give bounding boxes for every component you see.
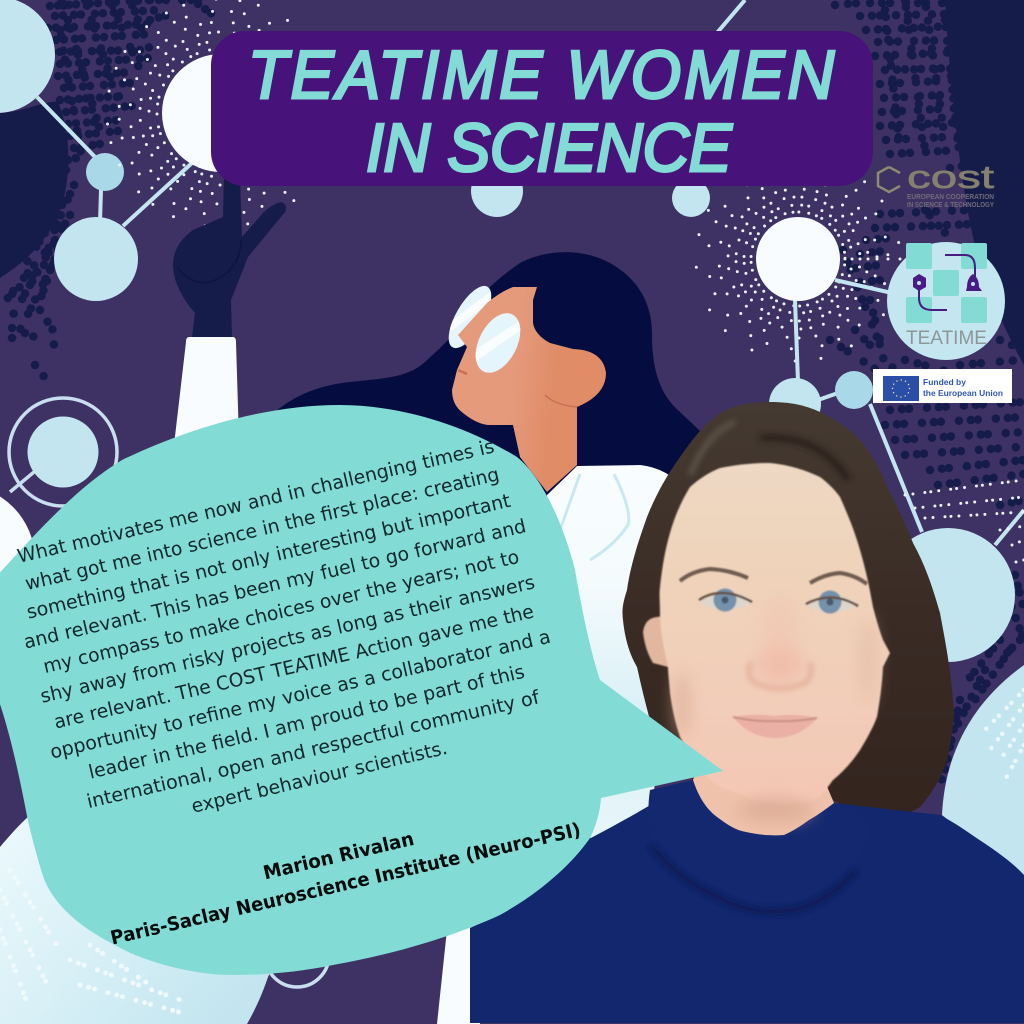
face: [660, 463, 890, 804]
hair strands: [690, 422, 848, 480]
attribution: Paris-Saclay Neuroscience Institute (Neuro-PSI): [108, 819, 583, 949]
ear: [643, 615, 672, 668]
lens back: [448, 286, 492, 348]
attribution: Marion Rivalan: [261, 828, 416, 884]
COST logo: cost: [907, 159, 994, 195]
quote text: something that is not only interesting but important: [25, 490, 513, 624]
gloved hand: [173, 173, 286, 337]
molecule: top left network: [0, 0, 192, 301]
EU funding badge: Funded by: [923, 377, 966, 387]
title text: IN SCIENCE: [366, 111, 732, 186]
COST logo: EUROPEAN COOPERATION: [907, 194, 994, 201]
EU funding badge: [873, 369, 1012, 403]
speech bubble: [0, 405, 723, 975]
sweater: [470, 780, 1024, 1023]
facial shading: [674, 595, 875, 822]
jaw line: [545, 395, 577, 407]
quote text: international, open and respectful community of: [85, 686, 543, 813]
EU flag: [883, 376, 919, 401]
quote text: opportunity to refine my voice as a collaborator and a: [48, 626, 553, 764]
sleeve: [174, 337, 239, 445]
large pale circle bottom left: [0, 815, 290, 1024]
collar shadow: [652, 845, 855, 911]
quote text: shy away from risky projects as long as their answers: [38, 571, 537, 708]
lens front: [476, 313, 520, 373]
title banner: [211, 31, 873, 186]
large pale circle right: [942, 665, 1024, 880]
EU funding badge: the European Union: [923, 388, 1003, 398]
title text: TEATIME WOMEN: [248, 38, 834, 113]
lab coat: [530, 465, 685, 860]
quote text: what got me into science in the first place: creating: [23, 463, 501, 595]
quote text: expert behaviour scientists.: [189, 737, 449, 818]
TEATIME logo: TEATIME: [906, 328, 987, 349]
ring molecule left: [0, 398, 117, 635]
face and neck: [452, 287, 606, 492]
COST logo: IN SCIENCE & TECHNOLOGY: [907, 202, 994, 209]
quote text: and relevant. This has been my fuel to go forward and: [22, 515, 528, 653]
hair: [275, 252, 720, 540]
coat lapels: [560, 474, 629, 560]
quote text: my compass to make choices over the years; not to: [41, 546, 521, 678]
mouth: [733, 715, 817, 738]
neck: [693, 760, 834, 835]
nose: [749, 662, 811, 688]
title text: [248, 38, 834, 186]
quote text: [15, 436, 553, 818]
quote text: What motivates me now and in challenging times is: [15, 436, 496, 568]
lips: [458, 370, 467, 374]
eyes and brows: [680, 569, 867, 614]
quote text: are relevant. The COST TEATIME Action gave me the: [52, 601, 536, 734]
coat lower strip: [437, 915, 480, 1024]
hair back: [622, 402, 954, 817]
molecule: centre and right network: [471, 0, 1024, 662]
COST logo: [878, 159, 994, 209]
scientist illustration: [173, 173, 720, 1024]
white dots: left cluster: [107, 0, 335, 227]
small ring bottom: [265, 923, 329, 987]
collar: [648, 780, 869, 907]
hand crease: [177, 240, 241, 282]
portrait photo: [470, 402, 1024, 1023]
quote text: leader in the field. I am proud to be part of this: [86, 661, 527, 784]
TEATIME logo: [887, 242, 1005, 360]
navy dot texture: [0, 0, 1024, 790]
white circle behind title: [162, 54, 280, 172]
